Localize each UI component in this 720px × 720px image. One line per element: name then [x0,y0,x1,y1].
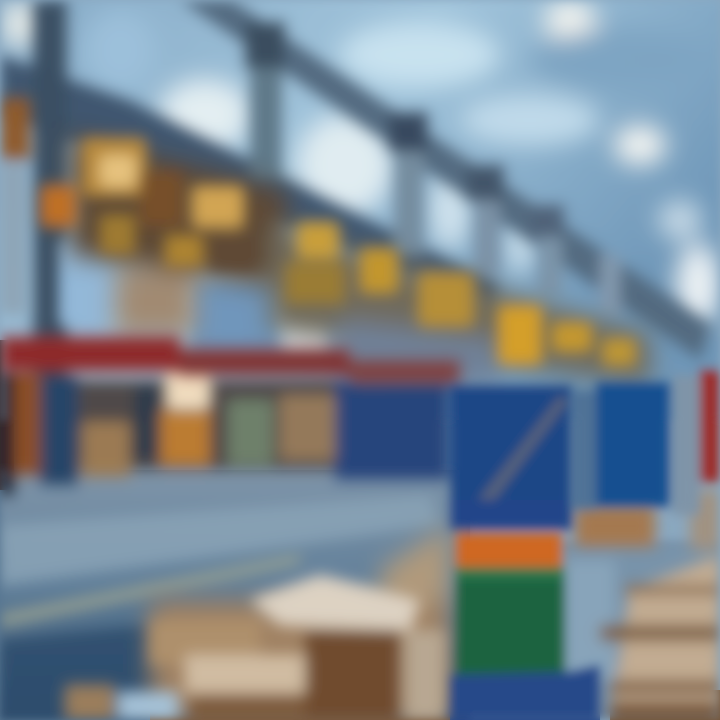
lower shelves [0,365,450,495]
light label [185,655,305,693]
blue base [450,665,600,720]
orange box [40,185,76,227]
background: ceiling sky [0,0,720,420]
floor [0,470,720,720]
amber box 4 [360,248,398,293]
large blue crate [450,385,572,530]
amber box 8 [602,338,636,366]
glowing lamp [165,365,211,411]
shelving with amber boxes [40,135,650,385]
floor marking line [0,555,300,626]
orange strip [456,533,562,567]
stacked totes [450,533,600,720]
dark brown box [305,630,400,720]
small blue gap [118,692,178,720]
upper diagonal roof beam [180,0,712,360]
right stack of cartons [565,490,720,720]
right blue crate [572,382,670,510]
cardboard boxes foreground [65,525,450,720]
amber box 2 [192,186,244,228]
pale box top [250,575,420,630]
green tote [456,570,564,678]
amber box 1 [82,138,146,196]
column far left [33,0,67,490]
roof beams and columns [0,0,712,490]
amber box 3 [297,222,339,258]
blue crates [450,382,670,530]
column 4 [474,175,500,275]
column 3 [394,125,424,255]
lower diagonal roof beam [0,55,500,310]
red racking band [0,336,460,384]
amber box 5 [418,272,474,327]
far-left wall and lights [0,98,327,358]
column 5 [538,215,562,295]
floor highlight [0,495,440,585]
red rack right edge [672,370,720,515]
column 2 [250,30,282,180]
amber box 7 [552,322,592,352]
amber box 6 [498,305,542,365]
